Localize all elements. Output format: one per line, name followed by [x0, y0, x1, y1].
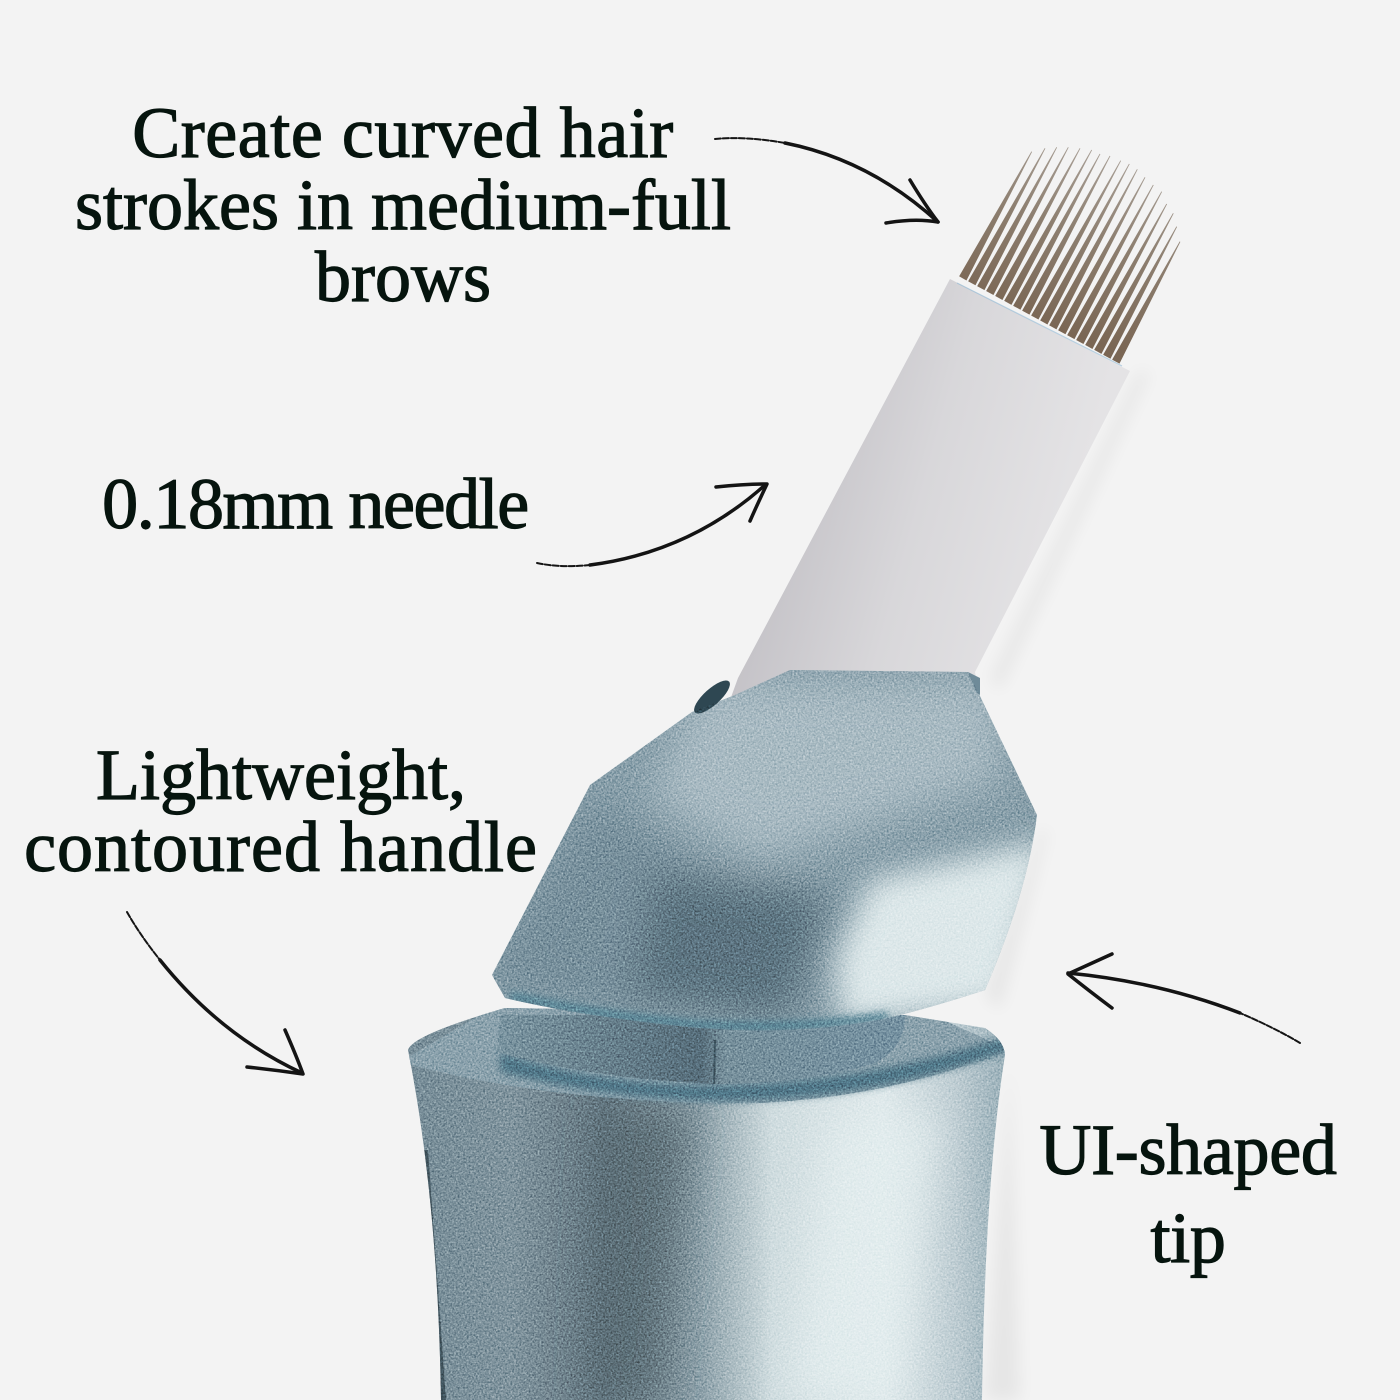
heading: tip shape: UI-shaped	[1039, 1110, 1337, 1190]
soft shadow behind tool	[985, 372, 1150, 1400]
rim of handle	[400, 1000, 1010, 1103]
arrow: to needles	[715, 138, 938, 223]
needles	[960, 147, 1180, 363]
lower handle	[400, 1000, 1020, 1400]
heading: curved hair strokes: strokes in medium-full	[75, 165, 731, 245]
arrow: to handle	[127, 912, 303, 1074]
tilted head	[480, 660, 1050, 1040]
heading: tip shape	[1039, 1110, 1337, 1278]
metallic grain texture	[400, 660, 1050, 1400]
heading: curved hair strokes	[75, 93, 731, 317]
collar under tilting head	[497, 1015, 905, 1084]
heading: handle	[24, 735, 538, 887]
small right tab at blade root	[968, 672, 980, 695]
heading: curved hair strokes: brows	[315, 237, 491, 317]
heading: handle: Lightweight,	[96, 735, 466, 815]
heading: tip shape: tip	[1150, 1198, 1226, 1278]
blade	[730, 279, 1130, 700]
heading: curved hair strokes: Create curved hair	[132, 93, 674, 173]
product illustration: microblading tool	[408, 147, 1180, 1400]
arrow: to tip	[1068, 954, 1300, 1043]
heading: handle: contoured handle	[24, 807, 538, 887]
small notch at blade root	[690, 676, 734, 718]
heading: needle size: 0.18mm needle	[102, 464, 528, 544]
arrow: to blade	[537, 484, 767, 566]
